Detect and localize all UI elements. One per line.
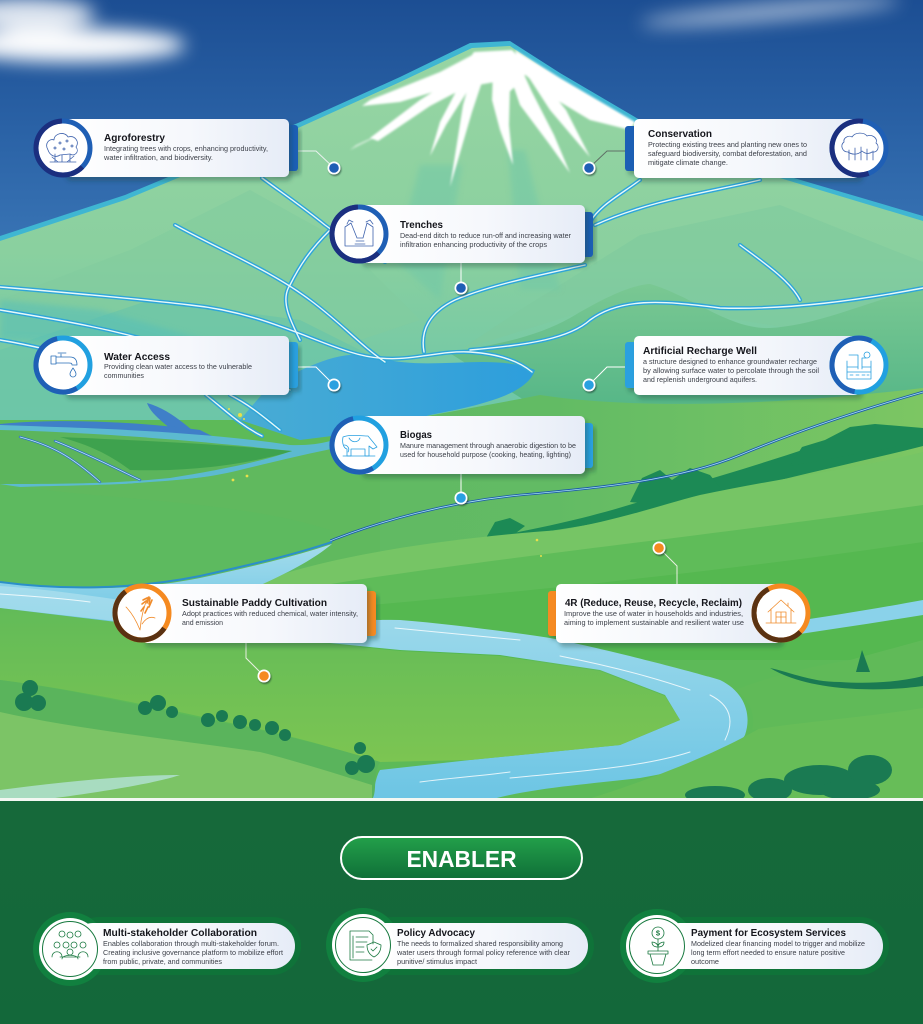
heading and text: 4R (Reduce, Reuse, Recycle, Reclaim) — [565, 597, 742, 609]
connector and dot: Conservation — [582, 151, 625, 174]
icon: trees with fruit — [47, 133, 77, 162]
text: Payment for Ecosystem Services — [691, 927, 846, 939]
island streams — [20, 437, 140, 482]
main river — [0, 586, 748, 800]
text: The needs to formalized shared responsibility among — [397, 939, 563, 948]
icon: rice stalk — [126, 597, 155, 630]
card: Sustainable Paddy Cultivation — [104, 575, 376, 651]
green wedge left — [0, 484, 330, 592]
dark thin stream — [320, 392, 923, 545]
heading and text: Integrating trees with crops, enhancing productivity, — [104, 144, 268, 153]
text: Creating inclusive governance platform to mobilize effort — [103, 948, 283, 957]
sky background — [0, 0, 923, 260]
heading and text: Artificial Recharge Well — [643, 345, 757, 357]
footer band — [0, 798, 923, 1024]
text: outcome — [691, 957, 719, 966]
heading and text: Agroforestry — [104, 132, 165, 144]
heading and text: and emission — [182, 618, 223, 627]
heading and text: Improve the use of water in households and industries, — [564, 609, 743, 618]
card: 4R — [548, 575, 819, 651]
heading and text: Conservation — [648, 128, 712, 140]
connector and dot: Trenches — [454, 262, 468, 294]
heading and text: mitigate climate change. — [648, 158, 728, 167]
enabler: Payment for Ecosystem Services — [620, 909, 889, 983]
heading and text: Protecting existing trees and planting new ones to — [648, 140, 807, 149]
text — [396, 927, 571, 966]
card: Biogas — [322, 408, 593, 482]
heading and text — [182, 597, 358, 627]
icon: recharge well — [847, 352, 871, 379]
heading and text — [104, 351, 252, 380]
icon: document with shield — [350, 931, 381, 960]
heading and text: aiming to implement sustainable and resilient water use — [564, 618, 744, 627]
foreground island — [0, 608, 680, 762]
lake and central water — [240, 355, 535, 440]
heading: ENABLER pill: ENABLER — [406, 846, 517, 872]
heading and text: Biogas — [400, 429, 432, 441]
mid-right hill — [448, 284, 923, 410]
card: Agroforestry — [25, 110, 298, 186]
heading and text: Sustainable Paddy Cultivation — [182, 597, 327, 609]
lower meadow — [0, 440, 380, 590]
enabler: Policy Advocacy — [326, 908, 594, 982]
text: long term effort needed to ensure nature positive — [691, 948, 845, 957]
lower-left bank — [0, 680, 380, 800]
connector and dot: Artificial Recharge Well — [582, 367, 625, 392]
connector and dot: Agroforestry — [298, 151, 340, 174]
side stream to left — [0, 544, 332, 628]
left band streams — [0, 403, 212, 436]
heading and text: Providing clean water access to the vulnerable — [104, 362, 252, 371]
card: Water Access — [26, 328, 298, 402]
heading and text: safeguard biodiversity, combat deforestation, and — [648, 149, 807, 158]
text — [691, 927, 865, 966]
connector and dot: 4R — [652, 542, 677, 585]
icon: trees — [842, 133, 878, 160]
card: Artificial Recharge Well — [625, 334, 890, 396]
river band far right — [790, 600, 923, 634]
text: Modelized clear financing model to trigger and mobilize — [691, 939, 865, 948]
heading and text: used for household purpose (cooking, heating, lighting) — [400, 450, 571, 459]
text — [103, 927, 283, 966]
heading and text: a structure designed to enhance groundwater recharge — [643, 357, 817, 366]
text: Policy Advocacy — [397, 927, 475, 939]
green valley — [0, 388, 923, 640]
heading and text: infiltration enhancing productivity of the crops — [400, 240, 547, 249]
icon: money plant in pot — [648, 927, 668, 965]
heading and text: communities — [104, 371, 144, 380]
text: from public, private, and communities — [103, 957, 222, 966]
light water band upper-left — [0, 425, 345, 500]
icon: cow — [343, 435, 377, 456]
mountain — [0, 41, 923, 420]
heading and text: Dead-end ditch to reduce run-off and increasing water — [400, 231, 572, 240]
connector and dot: Sustainable Paddy — [246, 642, 270, 682]
enabler: Multi-stakeholder Collaboration — [33, 912, 301, 986]
clouds — [0, 0, 900, 62]
dark green island — [0, 430, 292, 484]
icon: people group — [52, 931, 88, 959]
heading and text: Adopt practices with reduced chemical, water intensity, — [182, 609, 358, 618]
heading and text: and replenish underground aquifers. — [643, 375, 757, 384]
heading and text: by allowing surface water to percolate through the soil — [643, 366, 819, 375]
card: Trenches — [321, 196, 593, 272]
text: water users through formal policy reference with clear — [396, 948, 571, 957]
heading and text — [400, 219, 572, 249]
heading and text — [400, 429, 576, 459]
heading and text: Water Access — [104, 351, 170, 363]
heading and text — [643, 345, 819, 384]
ridge shading — [0, 150, 923, 420]
trees — [15, 650, 923, 804]
heading and text: Trenches — [400, 219, 443, 231]
heading and text: water infiltration, and biodiversity. — [103, 153, 213, 162]
icon: house — [766, 600, 796, 623]
card: Conservation — [625, 113, 894, 183]
connector and dot: Biogas — [454, 473, 468, 504]
icon: water tap — [51, 353, 77, 377]
heading and text — [564, 597, 744, 627]
icon: trench — [345, 220, 373, 246]
enabler: Payment for Ecosystem Services: $ — [656, 928, 661, 938]
yellow sparkles — [228, 408, 542, 557]
heading and text — [648, 128, 807, 167]
river highlights — [0, 594, 730, 782]
green hills band — [240, 452, 923, 640]
ground base — [0, 400, 923, 800]
snow cap — [350, 50, 635, 187]
text: punitive/ stimulus impact — [397, 957, 477, 966]
text: Multi-stakeholder Collaboration — [103, 927, 257, 939]
heading: ENABLER pill — [341, 837, 582, 879]
text: Enables collaboration through multi-stakeholder forum. — [103, 939, 279, 948]
river network on hills — [0, 178, 923, 436]
lower-right bank — [585, 706, 923, 800]
forest belt — [486, 424, 923, 540]
heading and text: Manure management through anaerobic digestion to be — [400, 441, 576, 450]
connector and dot: Water Access — [298, 367, 340, 392]
heading and text — [103, 132, 268, 162]
